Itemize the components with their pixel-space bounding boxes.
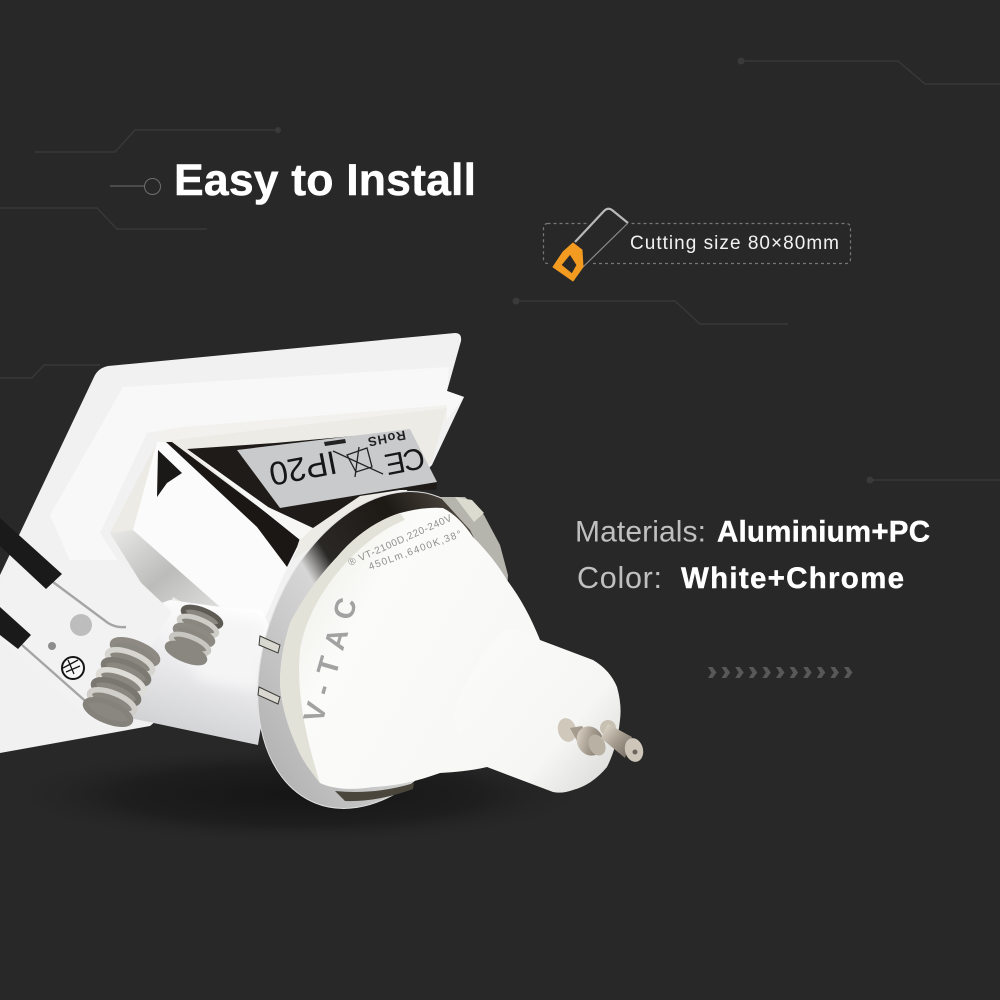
title marker — [110, 178, 160, 194]
spring front — [82, 635, 161, 729]
bulb neck — [453, 630, 621, 793]
label text: CE: CE — [382, 441, 427, 481]
frame inner wall shadow — [110, 530, 220, 620]
product shadow — [0, 745, 600, 845]
chrome ring — [213, 456, 541, 844]
bulb body — [280, 508, 560, 789]
metal clip plate — [0, 560, 172, 730]
label text: IP20: IP20 — [266, 444, 340, 493]
ring tabs — [258, 636, 280, 704]
spec: color — [577, 561, 904, 595]
bulb pins — [555, 716, 646, 764]
cutting size text: Cutting size 80×80mm — [630, 233, 839, 254]
decorative chevrons — [708, 667, 852, 678]
spring back — [165, 603, 223, 667]
spec: materials: Aluminium+PC — [717, 516, 930, 548]
black wire sleeves — [0, 518, 62, 649]
clip screw — [70, 614, 92, 636]
white square frame — [0, 333, 464, 753]
reflector cone: white lower part — [60, 600, 275, 745]
ring clip right side — [440, 497, 508, 590]
spec: materials — [575, 516, 930, 548]
ground symbol — [62, 657, 84, 679]
frame inner opening — [110, 408, 447, 618]
icon: hand saw — [548, 205, 632, 282]
reflector cone: chrome part — [157, 431, 437, 567]
bulb rim shading — [280, 513, 405, 783]
spec: color: Color: — [577, 561, 662, 595]
spec: color: White+Chrome — [681, 562, 904, 595]
ring lower dark crescent — [335, 783, 414, 801]
label text: RoHS: RoHS — [367, 428, 407, 450]
bulb printed specs: 450Lm,6400K,38° — [367, 529, 463, 573]
bulb printed specs: ® VT-2100D,220-240V — [347, 513, 454, 569]
dashed callout frame — [544, 224, 850, 264]
reflector cone: glare area — [133, 442, 298, 625]
spec: materials: Materials: — [575, 516, 706, 548]
callout: cutting size — [544, 205, 850, 282]
rating label — [237, 428, 437, 508]
title: Easy to Install — [174, 156, 476, 205]
product photo: downlight with bulb — [0, 333, 646, 845]
spring clip wires — [22, 582, 126, 718]
icon: crossed bin — [333, 447, 383, 477]
bulb printed brand: V-TAC — [298, 594, 364, 726]
